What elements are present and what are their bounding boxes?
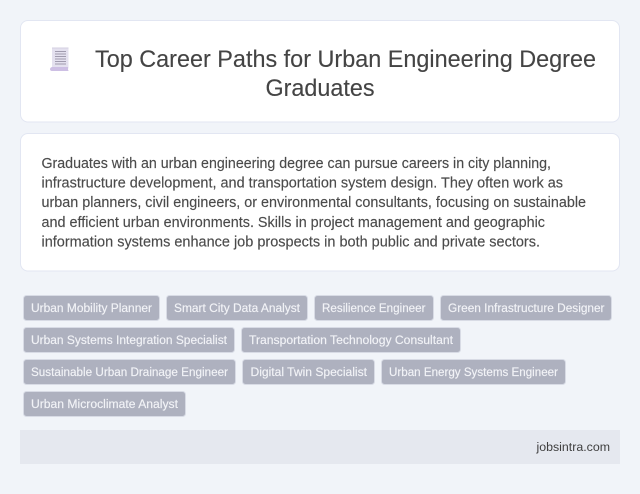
tag: Urban Energy Systems Engineer: Urban Energy Systems Engineer xyxy=(389,365,558,379)
tag: Sustainable Urban Drainage Engineer xyxy=(24,360,236,384)
tag: Urban Microclimate Analyst: Urban Microclimate Analyst xyxy=(31,397,179,411)
tag: Green Infrastructure Designer: Green Infrastructure Designer xyxy=(448,301,604,315)
text block: description xyxy=(42,156,586,250)
tag: Resilience Engineer: Resilience Engineer xyxy=(322,301,426,315)
footer xyxy=(20,430,620,464)
footer source text: jobsintra.com xyxy=(536,440,610,454)
tag: Digital Twin Specialist xyxy=(242,360,374,384)
tag: Transportation Technology Consultant xyxy=(242,328,460,352)
icon: paper scroll xyxy=(50,48,69,71)
tag: Urban Systems Integration Specialist xyxy=(24,328,234,352)
tag: Digital Twin Specialist: Digital Twin Specialist xyxy=(250,365,368,379)
tag: Urban Mobility Planner: Urban Mobility Planner xyxy=(31,301,152,315)
text block: description: infrastructure development, and transportation system design. They often work as xyxy=(42,176,563,192)
tag: Transportation Technology Consultant: Transportation Technology Consultant xyxy=(249,333,454,347)
tag: Smart City Data Analyst xyxy=(166,296,308,320)
title: Graduates xyxy=(266,75,374,102)
text block: description: and efficient urban environments. Skills in project management and geographic xyxy=(42,215,545,231)
tag: Urban Energy Systems Engineer xyxy=(382,360,566,384)
tag: Resilience Engineer xyxy=(314,296,434,320)
tag: Sustainable Urban Drainage Engineer: Sustainable Urban Drainage Engineer xyxy=(31,365,228,379)
tag: Urban Microclimate Analyst xyxy=(24,392,186,416)
title: Top Career Paths for Urban Engineering Degree xyxy=(95,46,596,73)
panel: description xyxy=(20,134,620,271)
text block: description: Graduates with an urban engineering degree can pursue careers in city planning, xyxy=(42,156,551,172)
tag list xyxy=(24,296,612,416)
tag: Smart City Data Analyst: Smart City Data Analyst xyxy=(174,301,301,315)
panel: header xyxy=(20,20,620,122)
title xyxy=(95,46,596,102)
tag: Urban Mobility Planner xyxy=(24,296,160,320)
tag: Urban Systems Integration Specialist: Urban Systems Integration Specialist xyxy=(31,333,228,347)
tag: Green Infrastructure Designer xyxy=(440,296,612,320)
text block: description: urban planners, civil engineers, or environmental consultants, focusing on sustainable xyxy=(42,195,586,211)
text block: description: information systems enhance job prospects in both public and private sectors. xyxy=(42,234,540,250)
